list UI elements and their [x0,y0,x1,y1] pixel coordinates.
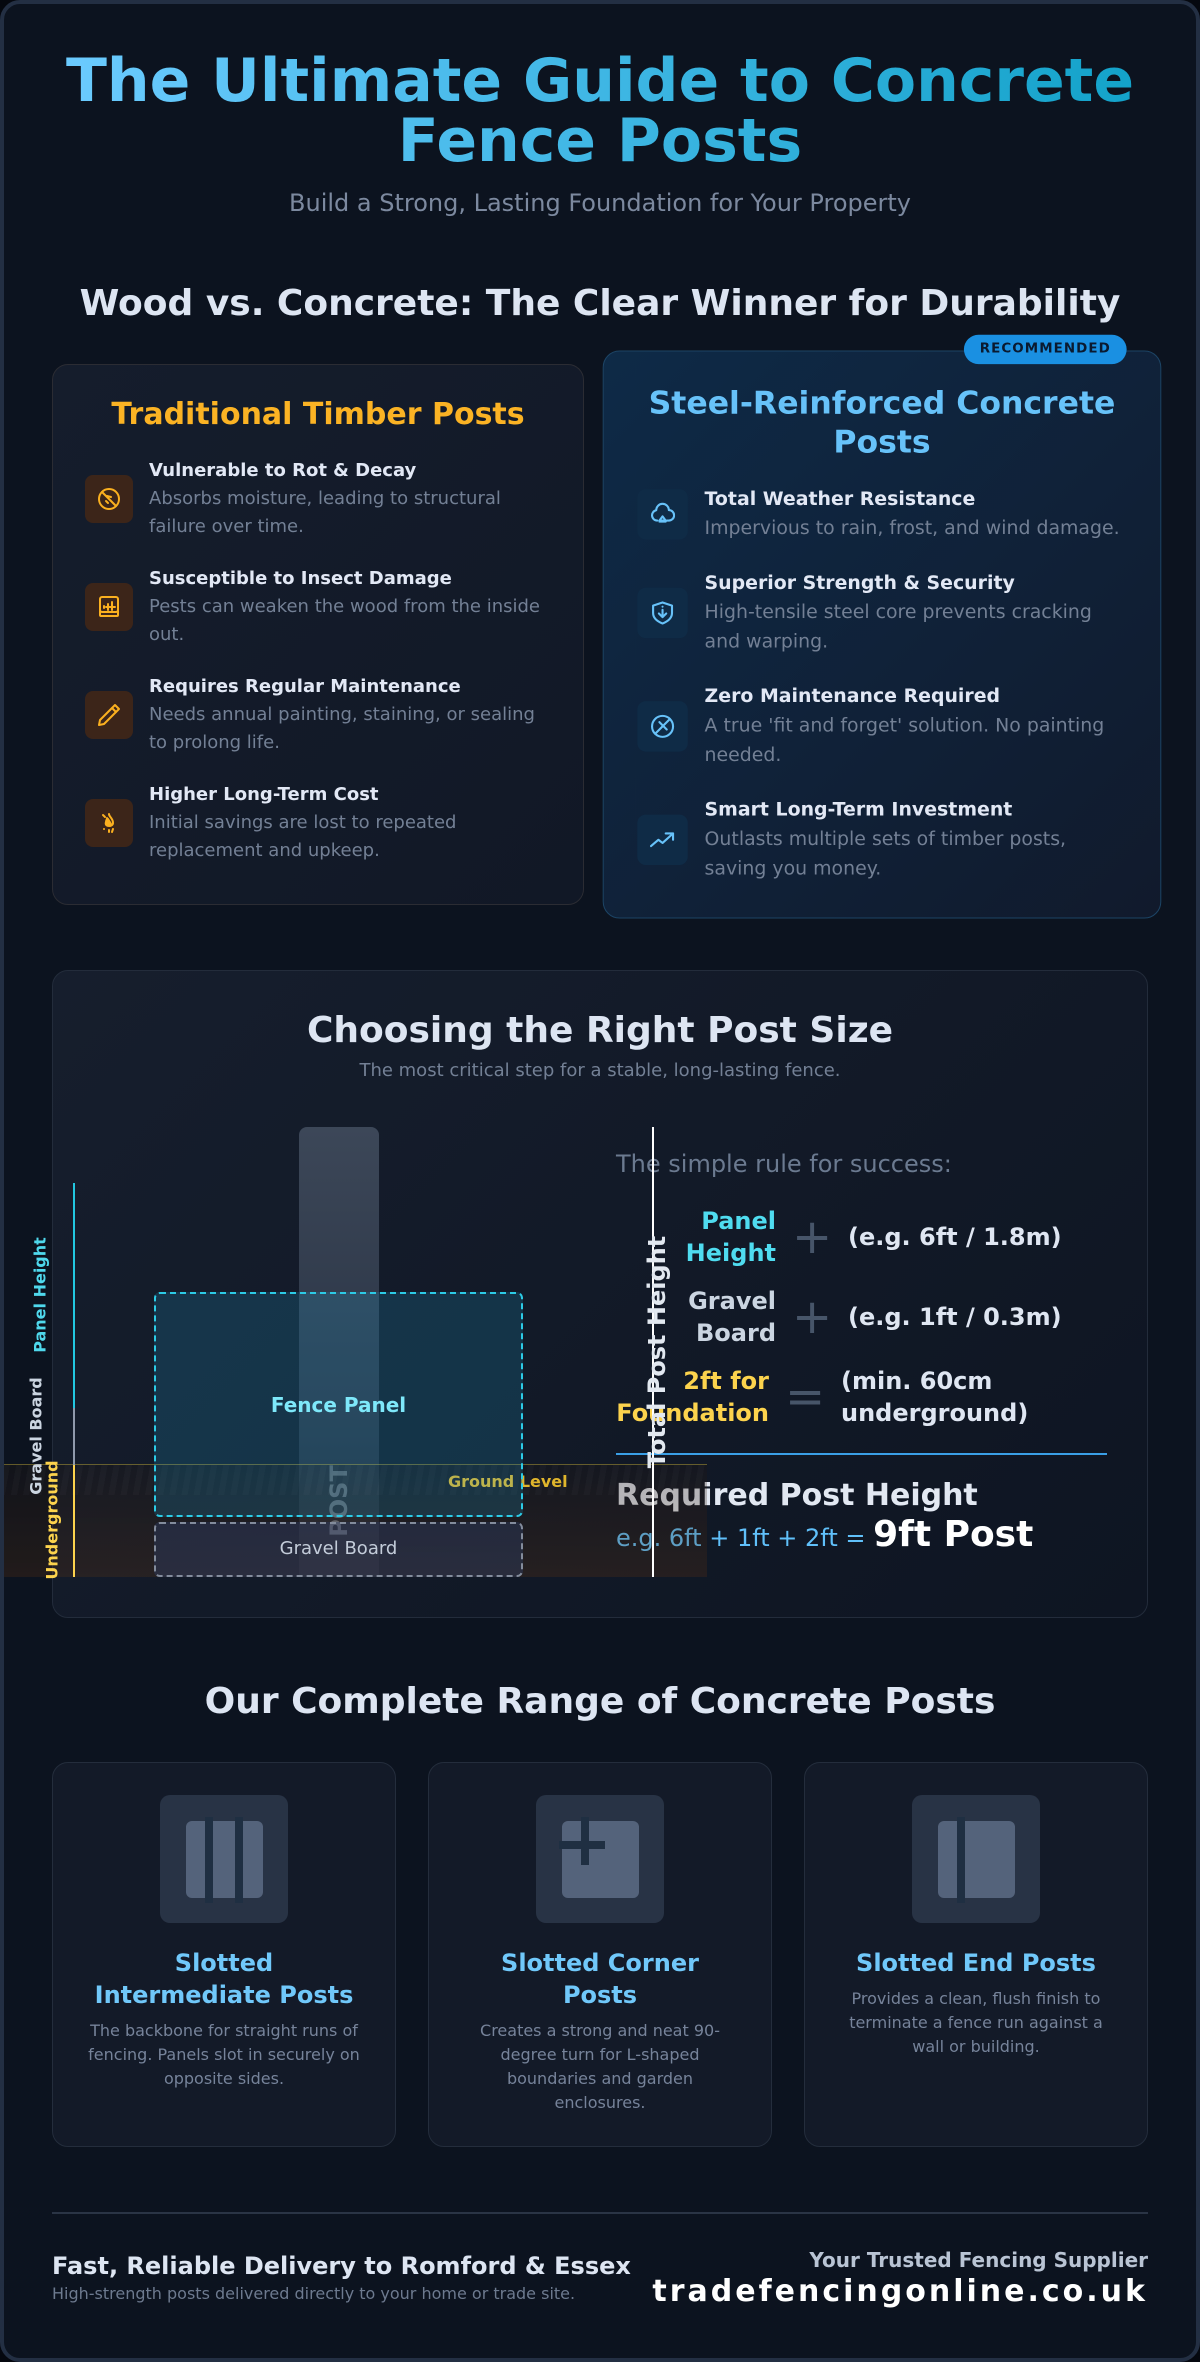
formula row: foundation: = [785,1369,825,1425]
result heading: Required Post Height [616,1478,978,1513]
timber heading: Traditional Timber Posts [111,397,525,432]
icon: intermediate post [160,1795,288,1923]
subtitle: Build a Strong, Lasting Foundation for Your Property [289,189,911,217]
rule intro: The simple rule for success: [616,1150,952,1178]
fence panel: Fence Panel [271,1392,406,1416]
card text: The backbone for straight runs of fencing. Panels slot in securely on opposite sides. [88,2021,360,2088]
item: investment: Smart Long-Term Investment [705,799,1012,821]
icon: end post [912,1795,1040,1923]
item: insects: Pests can weaken the wood from the inside out. [149,596,540,645]
footer delivery: Fast, Reliable Delivery to Romford & Essex [52,2252,631,2280]
item: rot: Absorbs moisture, leading to structural failure over time. [149,488,501,537]
post size subheading: The most critical step for a stable, long-lasting fence. [359,1060,841,1081]
marker: panel height [73,1183,75,1408]
footer delivery: High-strength posts delivered directly to your home or trade site. [52,2284,575,2303]
item: zero maintenance [638,686,1104,766]
item: insects: Susceptible to Insect Damage [149,568,452,589]
card title: Slotted Intermediate Posts [95,1949,353,2009]
item: cost: Higher Long-Term Cost [149,784,379,805]
formula row: gravel board: (e.g. 1ft / 0.3m) [848,1303,1062,1331]
footer brand: Your Trusted Fencing Supplier [809,2248,1148,2272]
card text: Provides a clean, flush finish to terminate a fence run against a wall or building. [849,1989,1103,2056]
formula row: panel height: + [792,1209,832,1265]
item: rot: Vulnerable to Rot & Decay [149,460,416,481]
badge: recommended [964,335,1127,364]
heading: post size: Choosing the Right Post Size [307,1010,893,1051]
item: weather [651,488,1120,540]
marker: gravel board [73,1408,75,1465]
gravel board: Gravel Board [280,1538,397,1558]
item: weather: Impervious to rain, frost, and wind damage. [705,518,1120,540]
marker: total post height [652,1127,654,1577]
item: cost: Initial savings are lost to repeated replacement and upkeep. [149,812,456,861]
formula row: foundation: 2ft for [683,1367,769,1395]
ground label: Ground Level [448,1472,568,1491]
heading: range: Our Complete Range of Concrete Posts [205,1681,995,1722]
item: strength: Superior Strength & Security [705,572,1015,594]
item: rot [85,460,501,537]
gravel board [154,1522,523,1577]
product card: end [804,1762,1148,2147]
fence panel [154,1292,523,1517]
formula row: panel height [686,1207,1062,1267]
footer divider [52,2212,1148,2214]
item: investment: Outlasts multiple sets of timber posts, saving you money. [705,828,1066,880]
label: underground: Underground [42,1460,62,1580]
item: maintenance [85,676,535,753]
formula row: panel height: Panel [701,1207,776,1235]
ground layer [4,1464,707,1577]
formula row: foundation: Foundation [616,1399,769,1427]
card title: Slotted End Posts [856,1949,1096,1977]
item: zero maintenance: A true 'fit and forget' solution. No painting needed. [705,715,1104,766]
footer delivery [52,2252,631,2303]
card title: Slotted Corner Posts [501,1949,699,2009]
item: zero maintenance: Zero Maintenance Required [705,686,1000,708]
diagram: post cross section [4,1127,707,1580]
item: weather: Total Weather Resistance [705,488,975,510]
formula row: foundation: (min. 60cm [841,1367,992,1395]
item: insects [85,568,540,645]
item: strength: High-tensile steel core prevents cracking and warping. [705,602,1092,653]
concrete heading: Steel-Reinforced Concrete Posts [649,385,1115,461]
panel: post size [52,970,1148,1618]
label: panel height: Panel Height [30,1237,50,1353]
panel: concrete posts [603,350,1161,919]
badge: recommended: RECOMMENDED [980,341,1111,357]
formula row: foundation: underground) [841,1399,1028,1427]
item: maintenance: Needs annual painting, staining, or sealing to prolong life. [149,704,535,753]
heading: wood vs concrete: Wood vs. Concrete: The Clear Winner for Durability [80,283,1120,324]
item: investment [638,799,1066,880]
formula row: panel height: Height [686,1239,776,1267]
item: maintenance: Requires Regular Maintenance [149,676,461,697]
footer brand [652,2248,1148,2309]
formula row: gravel board [688,1287,1062,1347]
formula row: panel height: (e.g. 6ft / 1.8m) [848,1223,1062,1251]
panel: timber posts [52,364,584,905]
post label: POST [325,1465,353,1537]
marker: underground [73,1465,75,1577]
result divider [616,1453,1107,1455]
result formula: e.g. 6ft + 1ft + 2ft = 9ft Post [616,1514,1033,1555]
label: gravel board: Gravel Board [26,1377,46,1495]
card text: Creates a strong and neat 90-degree turn for L-shaped boundaries and garden enclosures. [480,2021,720,2112]
formula row: gravel board: Board [696,1319,776,1347]
title: The Ultimate Guide to Concrete Fence Posts [66,46,1134,176]
item: strength [652,572,1092,653]
formula row: gravel board: Gravel [688,1287,776,1315]
formula row: foundation [616,1367,1028,1427]
product card: intermediate [52,1762,396,2147]
footer brand: tradefencingonline.co.uk [652,2274,1148,2309]
icon: corner post [536,1795,664,1923]
product card: corner [428,1762,772,2147]
formula row: gravel board: + [792,1289,832,1345]
post [299,1127,379,1577]
item: cost [85,784,456,861]
label: total post height: Total Post Height [643,1236,671,1468]
